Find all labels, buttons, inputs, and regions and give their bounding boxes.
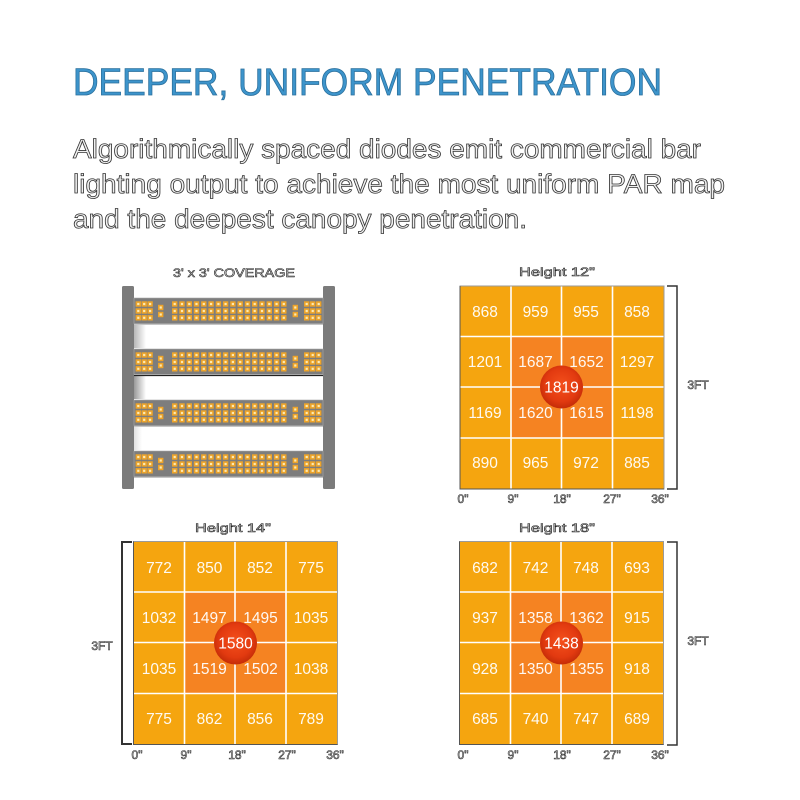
axis labels: 36" — [651, 748, 669, 762]
panel: PAR map height 14 — [91, 521, 344, 762]
values — [142, 560, 328, 728]
text block: description: lighting output to achieve the most uniform PAR map — [73, 169, 725, 199]
LED bar 1 — [134, 298, 323, 324]
values: 1497 — [192, 610, 227, 627]
values: 1495 — [243, 610, 278, 627]
values: 1355 — [569, 661, 604, 678]
values: 850 — [197, 560, 223, 577]
values: 1362 — [569, 610, 604, 627]
values: 1350 — [518, 661, 553, 678]
axis labels: 0" — [132, 748, 142, 762]
centre peak — [540, 366, 583, 408]
axis labels: 0" — [458, 748, 468, 762]
values: 772 — [146, 560, 172, 577]
values: 1032 — [142, 610, 176, 627]
values: 965 — [523, 455, 548, 472]
values: 1502 — [243, 661, 278, 678]
values: 775 — [146, 711, 172, 728]
values: 885 — [624, 455, 650, 472]
values: 747 — [573, 711, 599, 728]
size label: 3FT — [91, 639, 113, 653]
values: 852 — [247, 560, 273, 577]
heading: coverage: 3' x 3' COVERAGE — [173, 266, 295, 280]
fixture shadows — [134, 324, 323, 477]
values: 1198 — [620, 405, 654, 422]
values: 1035 — [294, 610, 328, 627]
size bracket — [667, 286, 677, 489]
values: 915 — [624, 610, 650, 627]
values: 959 — [523, 304, 548, 321]
values: 748 — [573, 560, 599, 577]
panel: light fixture coverage — [122, 266, 335, 489]
values: 918 — [624, 661, 650, 678]
centre peak: 1438 — [544, 636, 579, 652]
axis labels: 27" — [603, 748, 621, 762]
LED bar 2 — [134, 349, 323, 374]
text block: description: Algorithmically spaced diodes emit commercial bar — [73, 134, 701, 164]
values: 789 — [298, 711, 324, 728]
grid — [134, 542, 338, 744]
values: 1038 — [294, 661, 328, 678]
grid — [460, 286, 664, 489]
centre peak: 1580 — [218, 636, 253, 652]
values — [472, 560, 650, 728]
values: 856 — [247, 711, 273, 728]
fixture right post — [323, 286, 335, 489]
values: 1620 — [518, 405, 553, 422]
values: 868 — [472, 304, 498, 321]
centre peak: 1819 — [544, 380, 579, 396]
values: 1297 — [620, 354, 654, 371]
axis labels: 18" — [553, 748, 571, 762]
axis labels: 18" — [553, 492, 571, 506]
axis labels — [132, 748, 344, 762]
axis labels — [458, 748, 669, 762]
axis labels: 9" — [508, 748, 518, 762]
heading: height 12: Height 12" — [519, 265, 595, 279]
axis labels: 18" — [228, 748, 246, 762]
values: 775 — [298, 560, 324, 577]
values: 1615 — [569, 405, 604, 422]
axis labels: 27" — [603, 492, 621, 506]
values: 1519 — [192, 661, 227, 678]
values: 890 — [472, 455, 498, 472]
grid — [460, 542, 664, 744]
values: 972 — [573, 455, 599, 472]
panel: PAR map height 18 — [458, 521, 709, 762]
axis labels: 0" — [458, 492, 468, 506]
values: 742 — [523, 560, 548, 577]
heading: height 18: Height 18" — [519, 521, 595, 535]
values: 858 — [624, 304, 650, 321]
values: 689 — [624, 711, 650, 728]
text block: description — [73, 134, 725, 234]
values: 693 — [624, 560, 650, 577]
size label: 3FT — [687, 634, 709, 648]
values: 685 — [472, 711, 498, 728]
heading: height 14: Height 14" — [195, 521, 271, 535]
axis labels: 36" — [326, 748, 344, 762]
values — [468, 304, 654, 472]
axis labels: 36" — [651, 492, 669, 506]
values: 1201 — [468, 354, 502, 371]
centre peak — [214, 622, 257, 664]
fixture left post — [122, 286, 134, 489]
values: 1035 — [142, 661, 176, 678]
size label: 3FT — [687, 378, 709, 392]
values: 1652 — [569, 354, 604, 371]
size bracket — [667, 542, 677, 745]
title: DEEPER, UNIFORM PENETRATION — [73, 62, 662, 104]
axis labels: 9" — [181, 748, 191, 762]
axis labels: 9" — [508, 492, 518, 506]
values: 937 — [472, 610, 498, 627]
LED bar 4 — [134, 451, 323, 476]
LED bar 3 — [134, 400, 323, 426]
panel: PAR map height 12 — [458, 265, 709, 506]
centre peak — [540, 622, 583, 664]
text block: description: and the deepest canopy penetration. — [73, 204, 527, 234]
values: 862 — [197, 711, 222, 728]
values: 682 — [472, 560, 498, 577]
values: 1687 — [518, 354, 553, 371]
axis labels: 27" — [278, 748, 296, 762]
size bracket — [122, 542, 132, 744]
values: 1169 — [468, 405, 502, 422]
values: 955 — [573, 304, 599, 321]
values: 740 — [523, 711, 549, 728]
values: 1358 — [518, 610, 553, 627]
axis labels — [458, 492, 669, 506]
values: 928 — [472, 661, 498, 678]
